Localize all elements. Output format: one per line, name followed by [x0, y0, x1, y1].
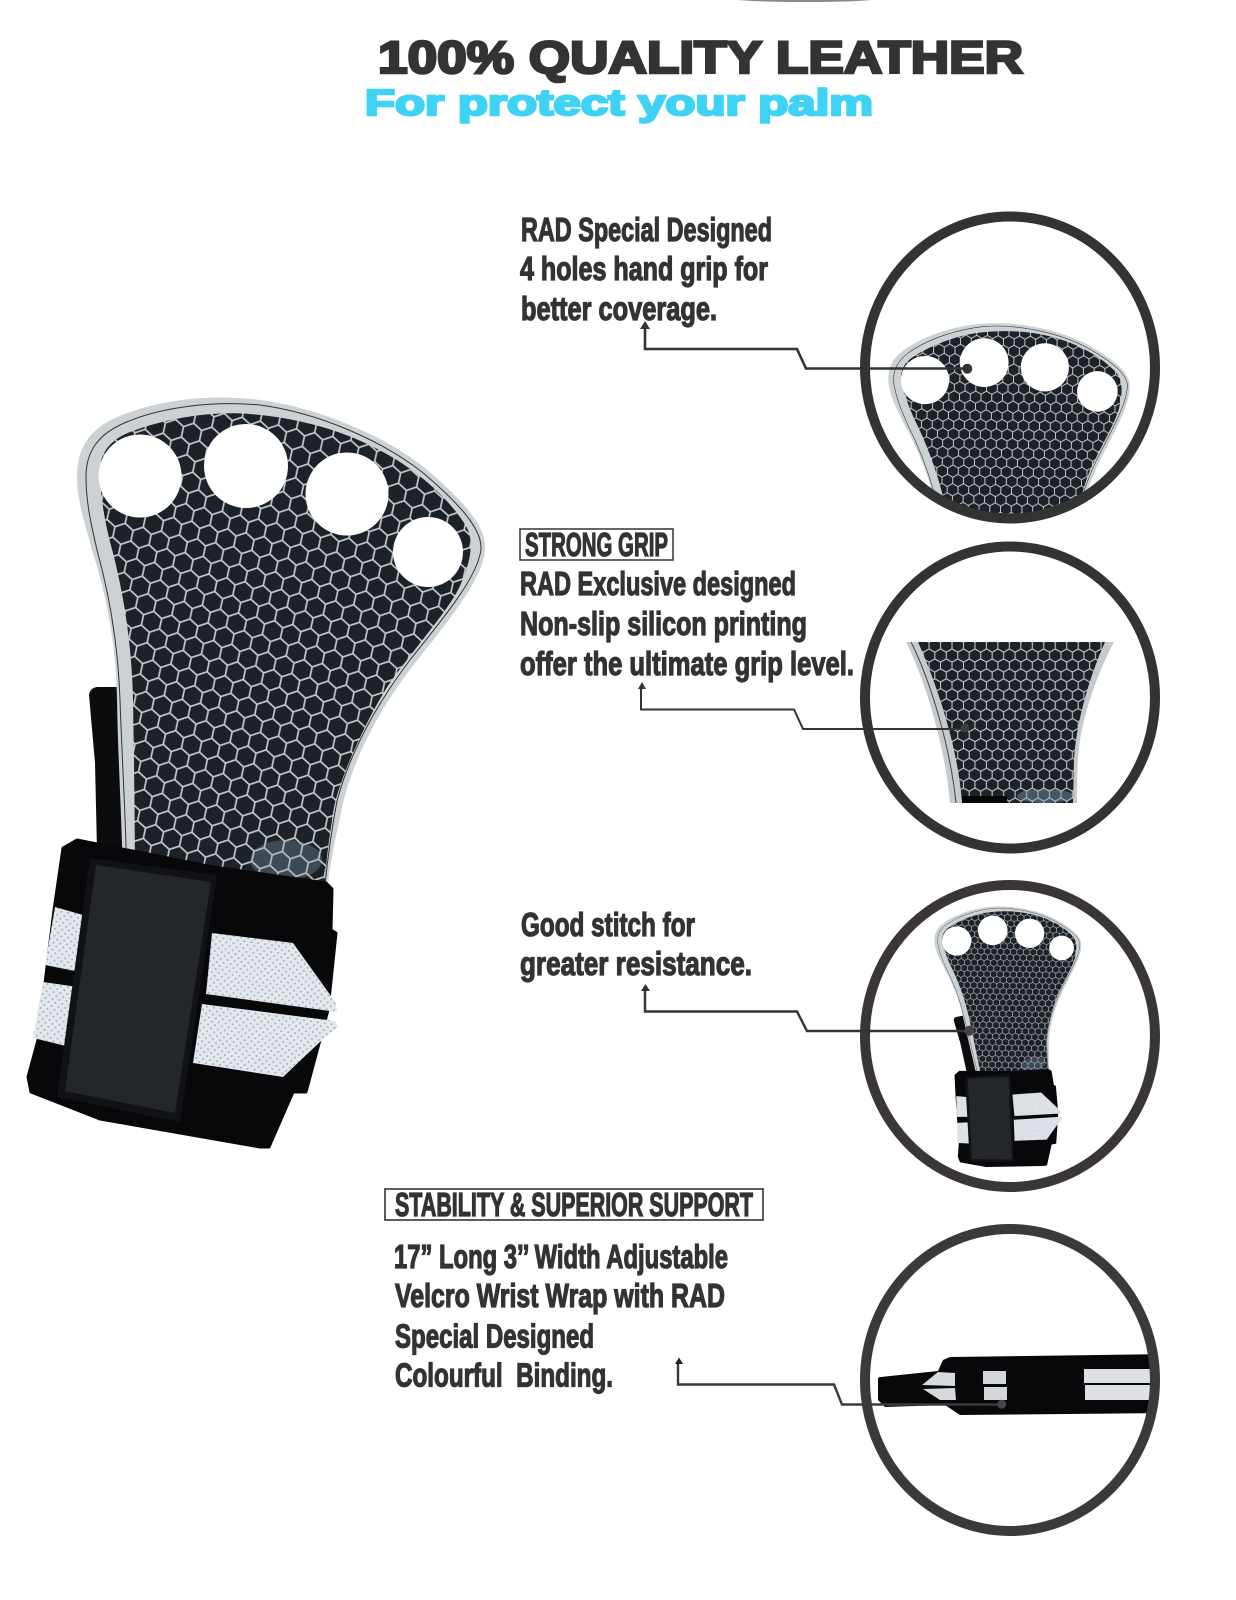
heading box: STRONG GRIP: [525, 526, 668, 563]
body text: Velcro Wrist Wrap with RAD: [395, 1277, 725, 1314]
callout: stability and support: [385, 1186, 763, 1394]
circle detail: wrist wrap strap: [865, 1229, 1170, 1531]
body text: [520, 565, 854, 682]
strap: [878, 1354, 1170, 1415]
rear wrap tab: [89, 687, 128, 850]
heading box: [385, 1186, 763, 1223]
callout text: 4 holes: RAD Special Designed: [521, 211, 772, 248]
callout text: 4 holes: better coverage.: [521, 290, 717, 327]
small product: [934, 906, 1082, 1167]
body text: 17” Long 3’’ Width Adjustable: [394, 1238, 728, 1275]
arrow: strap callout: [675, 1358, 1006, 1409]
callout text: 4 holes: [520, 211, 772, 327]
grip close-up: [888, 323, 1130, 514]
circle detail: full product: [865, 885, 1155, 1187]
ring: [865, 1229, 1155, 1531]
ring: [865, 885, 1155, 1187]
callout: strong grip: [520, 526, 854, 682]
leather palm grip: [77, 397, 485, 885]
body text: [394, 1238, 728, 1394]
body text: RAD Exclusive designed: [520, 565, 796, 602]
arrow: holes callout: [640, 321, 972, 374]
callout text: stitching: [520, 906, 752, 982]
heading box: [520, 526, 673, 563]
body text: Colourful Binding.: [395, 1356, 613, 1394]
wrist wrap: [28, 840, 338, 1147]
callout text: stitching: Good stitch for: [521, 906, 695, 943]
body text: offer the ultimate grip level.: [520, 645, 854, 682]
arrow: stitching callout: [641, 984, 974, 1036]
circle detail: finger holes: [860, 212, 1160, 524]
callout text: stitching: greater resistance.: [520, 945, 752, 982]
grip close-up: [906, 642, 1114, 803]
callout text: 4 holes: 4 holes hand grip for: [520, 250, 768, 287]
body text: Special Designed: [395, 1318, 594, 1354]
arrow: grip callout: [638, 682, 970, 732]
body text: Non-slip silicon printing: [520, 605, 807, 642]
heading box: STABILITY & SUPERIOR SUPPORT: [395, 1186, 753, 1223]
ring: [865, 216, 1155, 518]
subtitle: For protect your palm: [365, 82, 873, 123]
title: 100% QUALITY LEATHER: [378, 32, 1023, 83]
main product: hand grip with wrist wrap: [28, 397, 485, 1147]
ring: [865, 546, 1155, 848]
circle detail: silicone grip: [865, 546, 1155, 848]
